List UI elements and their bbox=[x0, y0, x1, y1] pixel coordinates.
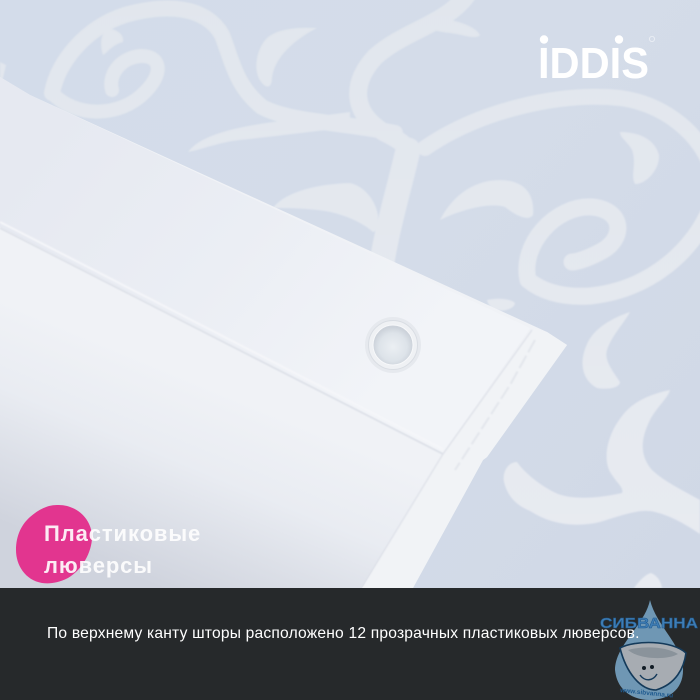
watermark: Sibvanna: www.sibvanna.ru bbox=[619, 687, 673, 700]
watermark: Sibvanna: СИБВАННА bbox=[600, 615, 698, 632]
hem stitching bbox=[0, 222, 535, 587]
heading: люверсы bbox=[44, 553, 153, 578]
folded hem bbox=[0, 77, 530, 453]
heading bbox=[44, 521, 201, 578]
side hem strip bbox=[362, 328, 567, 588]
fabric panel bbox=[0, 77, 567, 588]
grommet bbox=[365, 317, 421, 373]
heading: Пластиковые bbox=[44, 521, 201, 546]
body text: По верхнему канту шторы расположено 12 прозрачных пластиковых люверсов. bbox=[47, 625, 640, 642]
pink badge bbox=[16, 505, 92, 584]
dark footer bar bbox=[0, 588, 700, 700]
